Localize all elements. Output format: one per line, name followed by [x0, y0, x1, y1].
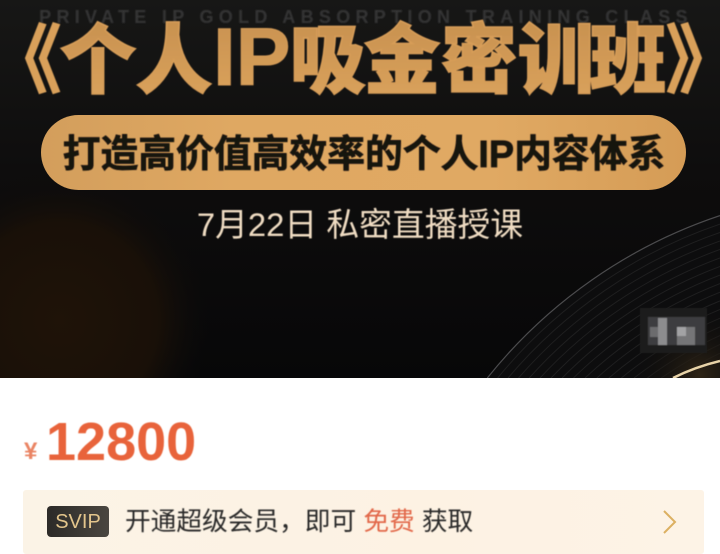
vinyl record decoration: [487, 216, 720, 378]
price: 12800: [46, 412, 196, 472]
title: IP: [213, 12, 290, 103]
price: ¥: [24, 438, 38, 465]
panel: price area: [0, 378, 720, 554]
pixelated mosaic: [640, 308, 707, 353]
title: [0, 12, 720, 104]
subtitle pill: 打造高价值高效率的个人IP内容体系: [63, 134, 665, 176]
subtitle pill: [41, 115, 686, 190]
date line: 7月22日 私密直播授课: [197, 206, 523, 243]
faded English subtitle: PRIVATE IP GOLD ABSORPTION TRAINING CLASS: [39, 7, 693, 27]
title: 人: [136, 19, 212, 104]
gold arc at corner: [673, 361, 720, 378]
title: 密: [441, 19, 517, 104]
title: 训: [518, 19, 594, 104]
title: 班: [590, 19, 666, 104]
panel: SVIP bar: [23, 490, 704, 554]
SVIP badge: SVIP: [55, 511, 101, 533]
title: 金: [364, 19, 440, 104]
icon: chevron arrow: [664, 511, 675, 533]
panel: dark hero banner: [0, 0, 720, 378]
title: 个: [60, 19, 136, 104]
promo text: 开通超级会员，即可 免费 获取: [125, 507, 473, 536]
title: 吸: [290, 19, 366, 104]
SVIP badge: [47, 506, 109, 537]
